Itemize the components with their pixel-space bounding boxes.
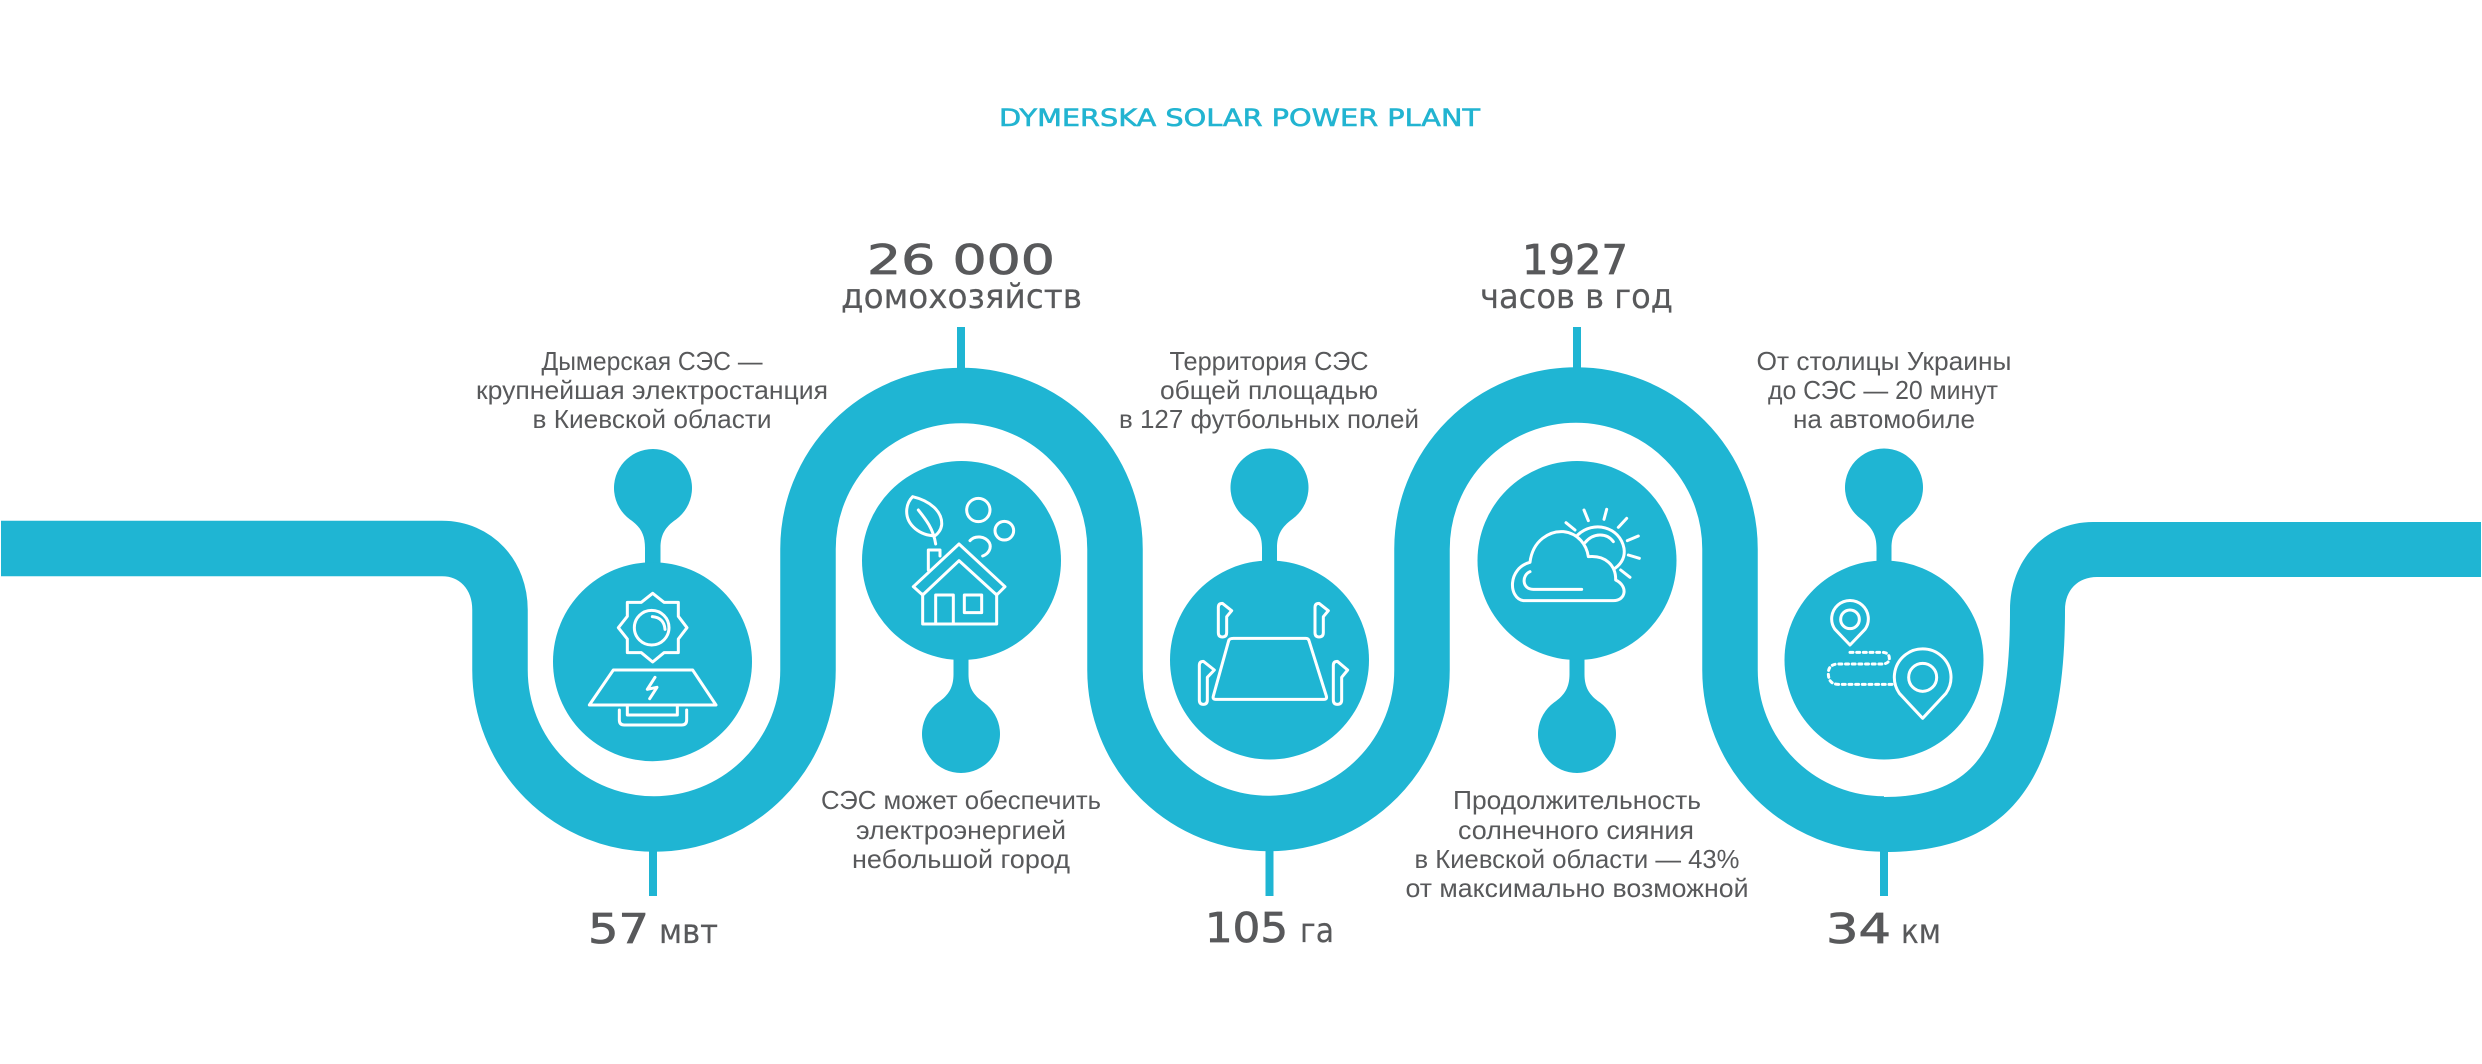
circle 5 <box>1784 560 1984 760</box>
stat: 34 km: км <box>1901 912 1941 952</box>
stat: 57 MW: 57 <box>588 905 649 953</box>
text: sunshine duration: в Киевской области — 43% <box>1414 844 1740 874</box>
node 4: sunshine hours <box>1478 461 1676 773</box>
circle 2 <box>862 461 1061 660</box>
text: largest power plant: в Киевской области <box>532 404 772 434</box>
spoon connector 2 <box>922 655 1000 773</box>
stat: 34 km <box>1826 905 1941 953</box>
circle 4 <box>1478 461 1676 660</box>
stat: 26 000 households <box>841 236 1082 317</box>
stat: 1927 hours: часов в год <box>1480 277 1673 317</box>
circle 3 <box>1170 560 1369 760</box>
text: distance from capital: до СЭС — 20 минут <box>1768 375 1998 405</box>
icon: football field <box>1199 603 1348 704</box>
stat: 1927 hours: 1927 <box>1522 236 1628 284</box>
node 2: households <box>862 461 1061 773</box>
stat: 105 ha: 105 <box>1205 904 1288 952</box>
spoon connector 1 <box>614 449 692 570</box>
text: distance from capital <box>1756 346 2012 434</box>
icon: route between pins <box>1828 600 1951 718</box>
title: DYMERSKA SOLAR POWER PLANT <box>999 104 1480 132</box>
stat: 26 000 households: домохозяйств <box>841 277 1082 317</box>
node 5: distance <box>1784 449 1984 760</box>
icon: eco house <box>907 497 1014 624</box>
text: sunshine duration: от максимально возможной <box>1406 873 1748 903</box>
text: largest power plant: крупнейшая электростанция <box>476 375 828 405</box>
text: territory: в 127 футбольных полей <box>1119 404 1419 434</box>
node 1: solar capacity <box>553 449 752 761</box>
stat: 1927 hours <box>1480 236 1673 317</box>
stat: 34 km: 34 <box>1826 905 1891 953</box>
text: territory <box>1119 346 1419 434</box>
text: distance from capital: на автомобиле <box>1793 404 1975 434</box>
text: sunshine duration: солнечного сияния <box>1458 815 1694 845</box>
circle 1 <box>553 562 752 761</box>
text: sunshine duration <box>1406 785 1748 903</box>
text: can supply a small town <box>821 785 1101 874</box>
icon: cloud and sun <box>1512 509 1639 601</box>
stat: 105 ha: га <box>1300 911 1334 951</box>
winding timeline ribbon <box>1 327 2481 896</box>
spoon connector 5 <box>1845 449 1923 570</box>
stat: 105 ha <box>1205 904 1334 952</box>
text: sunshine duration: Продолжительность <box>1453 785 1701 815</box>
spoon connector 3 <box>1230 449 1308 570</box>
text: can supply a small town: небольшой город <box>852 844 1070 874</box>
icon: sun over solar panel <box>589 593 716 725</box>
text: largest power plant: Дымерская СЭС — <box>542 346 762 376</box>
stat: 57 MW <box>588 905 718 953</box>
text: territory: общей площадью <box>1160 375 1378 405</box>
text: can supply a small town: электроэнергией <box>856 815 1066 845</box>
spoon connector 4 <box>1538 655 1616 773</box>
text: distance from capital: От столицы Украины <box>1756 346 2012 376</box>
text: largest power plant <box>476 346 828 434</box>
text: can supply a small town: СЭС может обеспечить <box>821 785 1101 815</box>
stat: 57 MW: мвт <box>659 912 718 952</box>
stat: 26 000 households: 26 000 <box>867 236 1055 284</box>
node 3: area <box>1170 449 1369 760</box>
text: territory: Территория СЭС <box>1170 346 1368 376</box>
